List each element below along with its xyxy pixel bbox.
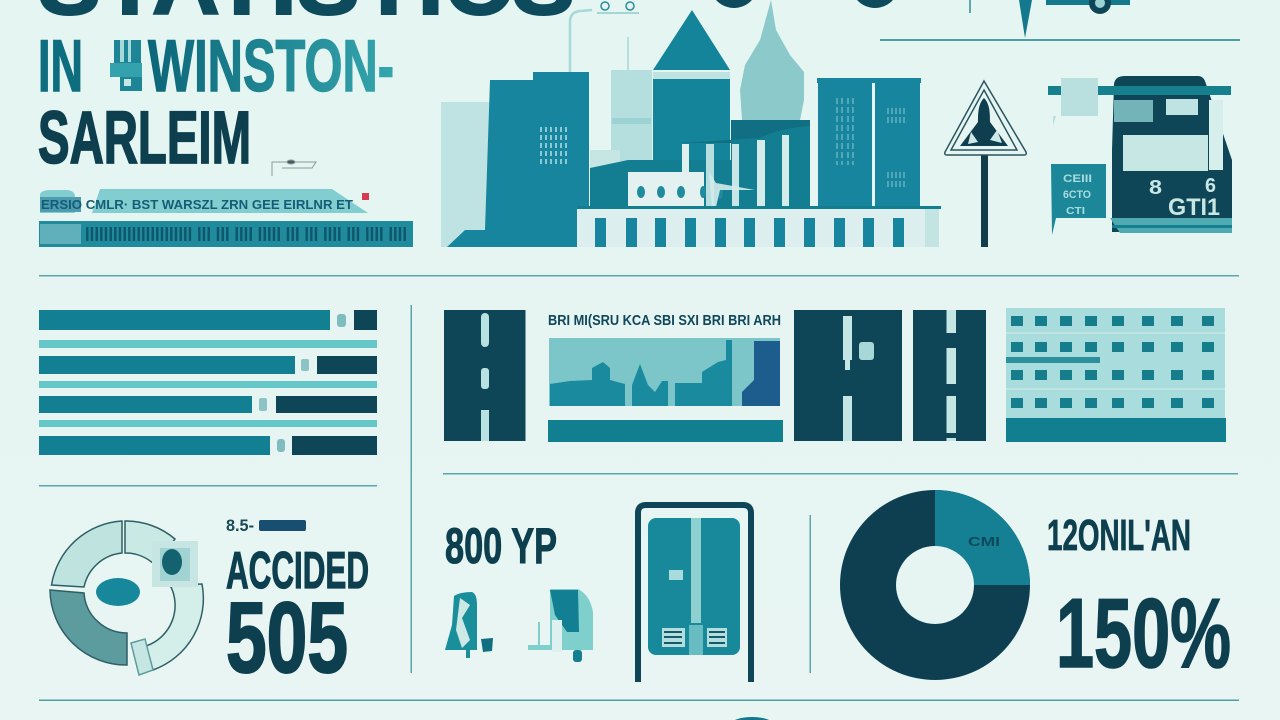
divider under bars [39,485,377,486]
icon: figure right [528,589,593,662]
side panel: 6CTO [1063,189,1091,201]
bus lettering [1149,175,1220,221]
divider top right [880,39,1240,41]
bar 4 [39,436,377,455]
bar 1 [39,310,377,330]
skyline antenna [570,10,592,83]
bus bottom stripe [1110,218,1232,233]
donut card [152,541,198,587]
accident caption [226,516,306,535]
vertical divider right [810,515,811,673]
divider middle right [443,473,1238,474]
icon: road warning sign [945,81,1026,247]
heading: in Winston-: IN [38,26,83,107]
photo caption: BRI MI(SRU KCA SBI SXI BRI BRI ARH [548,312,781,329]
skyline base with windows [577,206,941,247]
photo panel: city skyline [548,312,783,442]
divider bottom [39,700,1239,701]
bar 3 [39,396,377,413]
donut chart: share: CMI [968,534,1000,549]
small top-right cropped icons [969,0,1130,38]
bus windows [1114,99,1223,171]
heading: Sarleim: SARLEIM [38,96,251,179]
small icons above skyline [597,2,639,14]
road tile 1 [444,310,526,441]
accident caption: 8.5- [226,516,254,535]
bus lettering: 6 [1205,175,1216,197]
skyline main tower [447,72,589,247]
bus stop sign [1053,78,1098,126]
skyline white box with trees [628,172,755,207]
skyline right buildings [817,78,921,208]
donut segment top right [125,521,175,565]
divider under header [39,275,1239,276]
bus stop bar [1048,86,1231,95]
stat: accident label: ACCIDED [226,542,369,600]
donut segment top left [52,521,122,587]
road tile 3 [913,310,986,441]
donut chart: accident breakdown [50,521,203,675]
donut chart: share [840,490,1030,680]
cropped footer icon [730,717,774,720]
title: cropped top heading [38,0,899,34]
bus lettering: 8 [1149,177,1162,199]
small sketch mark [272,160,316,176]
bar 2 [39,356,377,374]
donut segment right [146,584,203,670]
banner strip with caption [40,189,369,213]
vertical divider left [410,305,412,673]
icon: figure left [445,592,493,658]
heading: in Winston- [38,26,394,107]
heading: in Winston-: WINSTON- [148,26,394,107]
banner strip with fine print [39,221,413,247]
skyline pointed tower [653,10,730,179]
donut small card [131,639,153,675]
icon: door frame panel [638,505,751,682]
icon: building in heading [110,40,142,91]
skyline canopy and columns [590,120,810,247]
donut centre blob [96,578,140,606]
side panel: CTI [1066,206,1085,217]
donut segment dark [50,590,127,665]
bus lettering: GTI1 [1168,194,1220,221]
stat: 800 YP: 800 YP [445,518,557,574]
side panel: CEIII [1063,173,1092,185]
illustration: city skyline [441,0,941,247]
side panel [1051,164,1106,235]
banner strip with fine print: IIIIIIIIIIIIIIIIIIIIIII III III IIII IIIII III III IIII III IIII IIII [85,224,407,246]
banner strip with caption: ERSIO CMLR· BST WARSZL ZRN GEE EIRLNR ET [41,197,353,212]
bus body [1112,76,1232,232]
bar chart: horizontal bars [39,310,377,455]
icon: bus stop and bus [1048,76,1232,235]
road tile 2 [794,310,902,441]
stat label: 120NIL'AN: 12ONIL'AN [1047,511,1191,560]
skyline background buildings [441,0,804,247]
stat: 505: 505 [226,582,348,694]
building facade panel [1006,308,1226,442]
